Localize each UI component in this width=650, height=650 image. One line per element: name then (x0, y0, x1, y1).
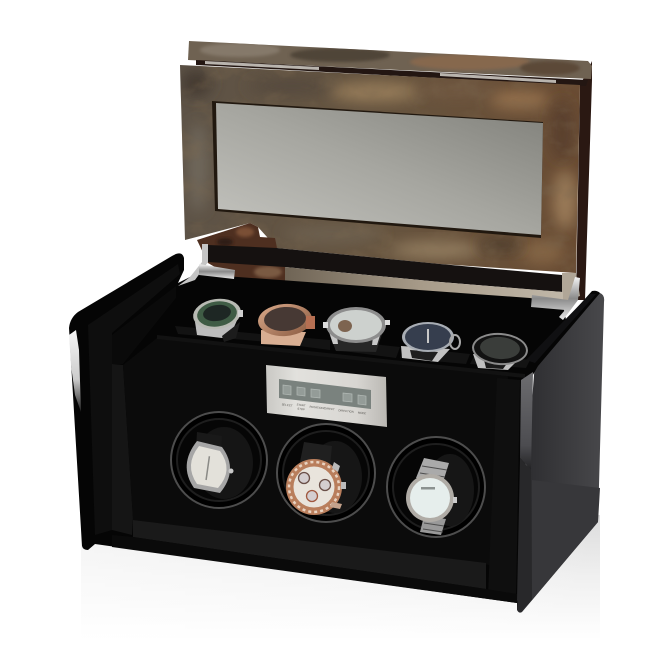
winder 2 with rose gold chronograph (277, 424, 375, 522)
bottom lip (112, 535, 517, 603)
watch 1: green dial (191, 296, 243, 342)
left stepped frame (88, 264, 180, 535)
tonneau case (187, 441, 230, 493)
bezel (286, 459, 342, 515)
inner column (112, 364, 133, 535)
watch 3: skeleton white dial (323, 307, 390, 352)
cabinet body (69, 253, 604, 613)
bottom ledge (133, 520, 486, 589)
display buttons (283, 385, 366, 405)
right bezel top edge (526, 294, 596, 363)
left lid hinge (178, 244, 235, 286)
open lid (180, 41, 592, 302)
piano hinges (205, 61, 556, 83)
button captions: SELECT (281, 402, 293, 408)
dark reflection band (208, 245, 562, 292)
bracelet (416, 458, 449, 535)
display window (279, 379, 371, 409)
button captions: DIRECTION (338, 408, 354, 414)
wood frame (180, 65, 580, 275)
winder ring (277, 424, 375, 522)
watch 2: rose gold (257, 302, 315, 346)
cushion (426, 454, 474, 526)
cushion (308, 441, 362, 513)
right velvet column (488, 378, 520, 600)
button captions: STOP (297, 407, 305, 411)
tray front edge (157, 335, 525, 378)
button captions (281, 402, 367, 415)
tray watches (191, 296, 529, 370)
velvet front panel (123, 338, 508, 565)
watch 4: navy dial (401, 322, 460, 362)
strap (300, 442, 332, 466)
case (406, 474, 454, 522)
right side face (517, 293, 604, 613)
floor shadow (81, 515, 600, 640)
under-lid burl patch (197, 223, 285, 282)
right bevel (520, 372, 533, 470)
cushion (195, 427, 253, 499)
black front frame (69, 253, 600, 610)
lid top strip (188, 41, 592, 79)
button captions: MODE (358, 411, 367, 415)
lower right pale wood area (562, 273, 580, 302)
pale reflection band (285, 267, 563, 302)
lid rear edge (576, 61, 592, 300)
control panel (266, 365, 387, 427)
right lid hinge (531, 277, 580, 320)
button captions: ROTATION/DIRECT (309, 405, 335, 411)
subdials (298, 472, 310, 484)
product illustration: watch winder cabinet (69, 41, 604, 613)
strap (196, 432, 222, 452)
watch 5: black dial (471, 331, 529, 370)
button captions: START (296, 403, 306, 407)
tray slots (175, 326, 530, 368)
winder ring (171, 412, 267, 508)
winder 3 with steel bracelet watch (387, 437, 485, 537)
winder 1 with tonneau watch (171, 412, 267, 508)
mirror (212, 101, 543, 238)
left gloss highlight (69, 330, 81, 412)
winder ring (387, 437, 485, 537)
hinge gap (196, 60, 588, 86)
